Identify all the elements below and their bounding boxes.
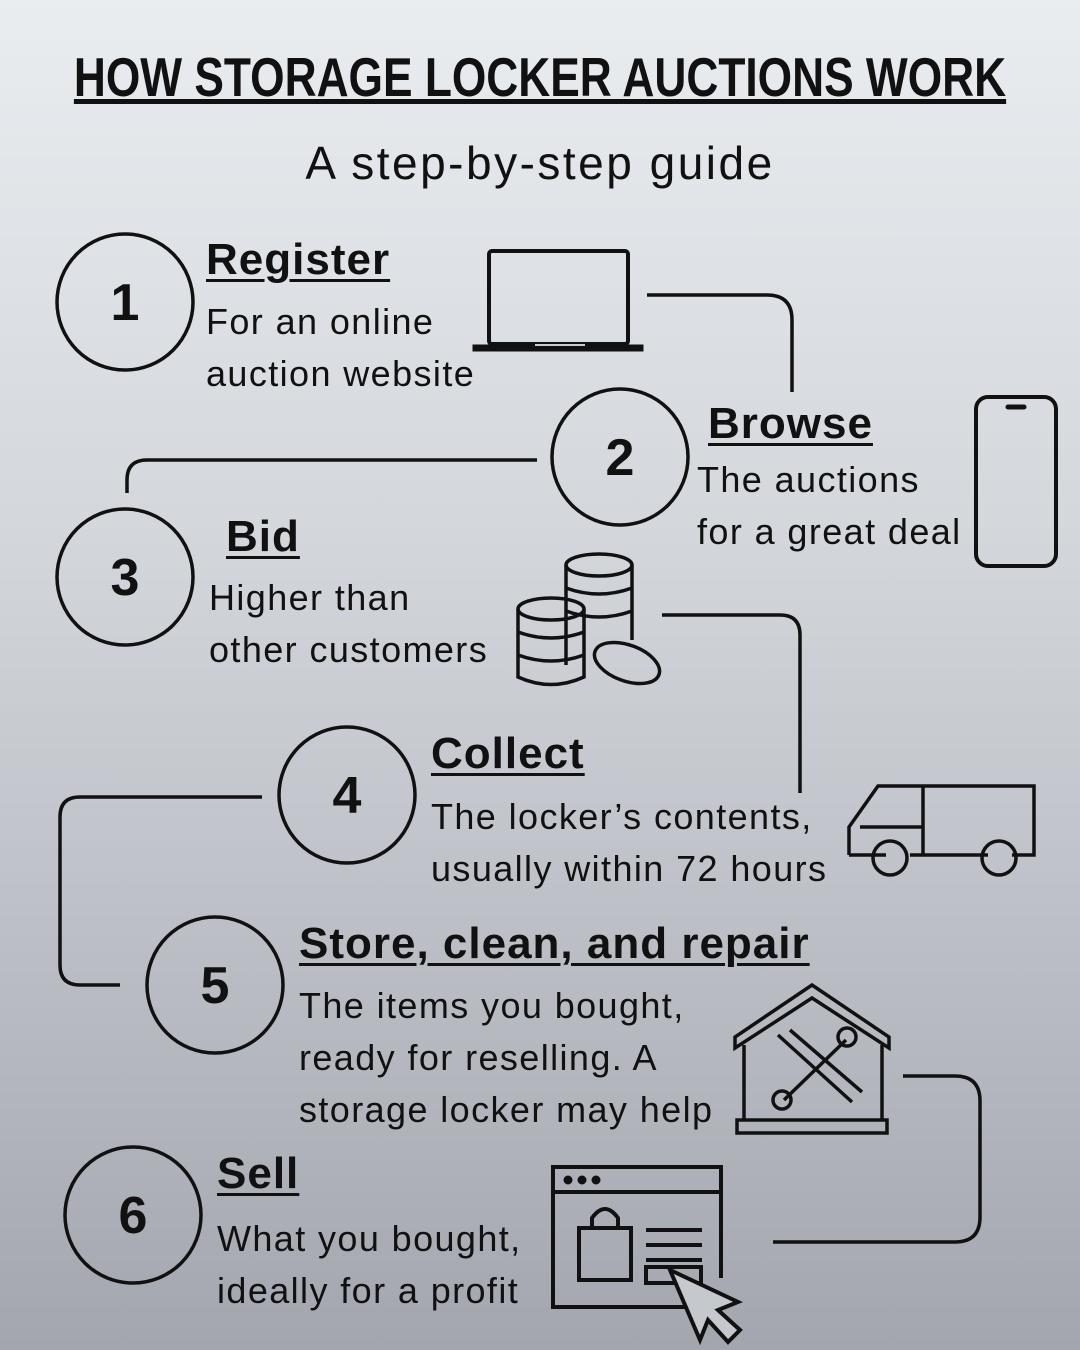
title: HOW STORAGE LOCKER AUCTIONS WORK	[74, 46, 1006, 108]
step 6 text: What you bought,	[217, 1218, 522, 1259]
step 1 text: For an online	[206, 301, 434, 342]
step 6 text	[217, 1149, 522, 1311]
text: 3	[111, 549, 139, 607]
step 5 text: storage locker may help	[299, 1089, 713, 1130]
step circles	[57, 234, 688, 1283]
step 4 text: The locker’s contents,	[431, 796, 813, 837]
step 3 text: Higher than	[209, 577, 411, 618]
icon: phone	[976, 397, 1056, 566]
step 3 text: other customers	[209, 629, 488, 670]
step 2 text: for a great deal	[697, 511, 962, 552]
step 5 text	[299, 919, 810, 1130]
text: 1	[111, 274, 139, 332]
step 4 text: Collect	[431, 729, 585, 778]
step 5 text: Store, clean, and repair	[299, 919, 810, 968]
step 3 text	[209, 512, 488, 670]
step 4 text: usually within 72 hours	[431, 848, 827, 889]
subtitle: A step-by-step guide	[305, 137, 775, 189]
step numbers	[111, 274, 634, 1245]
icon: van	[849, 786, 1034, 875]
connector arrows	[60, 295, 980, 1242]
step 2 text: The auctions	[697, 459, 920, 500]
step 2 text	[697, 399, 962, 552]
icon: browser shop	[553, 1167, 740, 1342]
step 1 text: Register	[206, 235, 390, 284]
text: 6	[119, 1187, 147, 1245]
step 4 text	[431, 729, 827, 889]
step 5 text: The items you bought,	[299, 985, 685, 1026]
step 6 text: Sell	[217, 1149, 299, 1198]
step 5 text: ready for reselling. A	[299, 1037, 658, 1078]
step 3 text: Bid	[226, 512, 300, 561]
icon: coins	[518, 554, 665, 692]
step 1 text	[206, 235, 475, 394]
icon: laptop	[473, 251, 643, 351]
text: 2	[606, 429, 634, 487]
text: 5	[201, 957, 229, 1015]
step 6 text: ideally for a profit	[217, 1270, 519, 1311]
icon: house with tools	[735, 985, 889, 1133]
step 1 text: auction website	[206, 353, 475, 394]
text: 4	[333, 767, 361, 825]
step 2 text: Browse	[708, 399, 873, 448]
